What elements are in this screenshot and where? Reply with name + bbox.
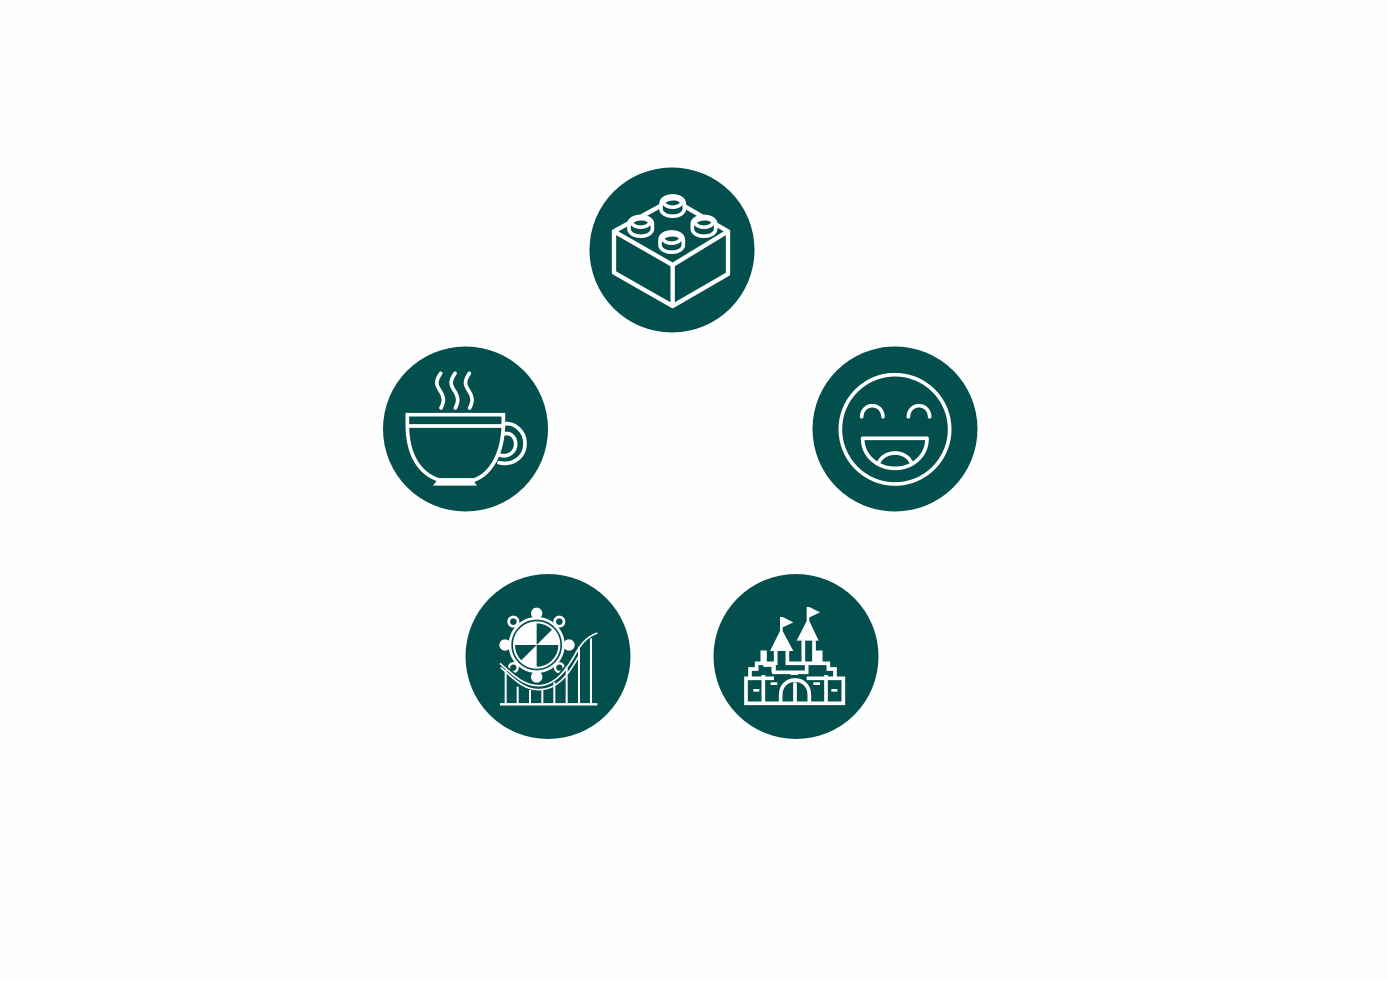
icon: coffee cup — [383, 346, 548, 512]
wheel wedges — [514, 622, 559, 668]
icon: laughing face — [812, 346, 978, 512]
coaster track — [500, 633, 597, 690]
coaster posts — [500, 638, 597, 704]
icon: toy brick — [590, 168, 754, 332]
icon: ferris wheel and roller coaster — [466, 574, 630, 739]
icon: castle — [714, 574, 878, 739]
